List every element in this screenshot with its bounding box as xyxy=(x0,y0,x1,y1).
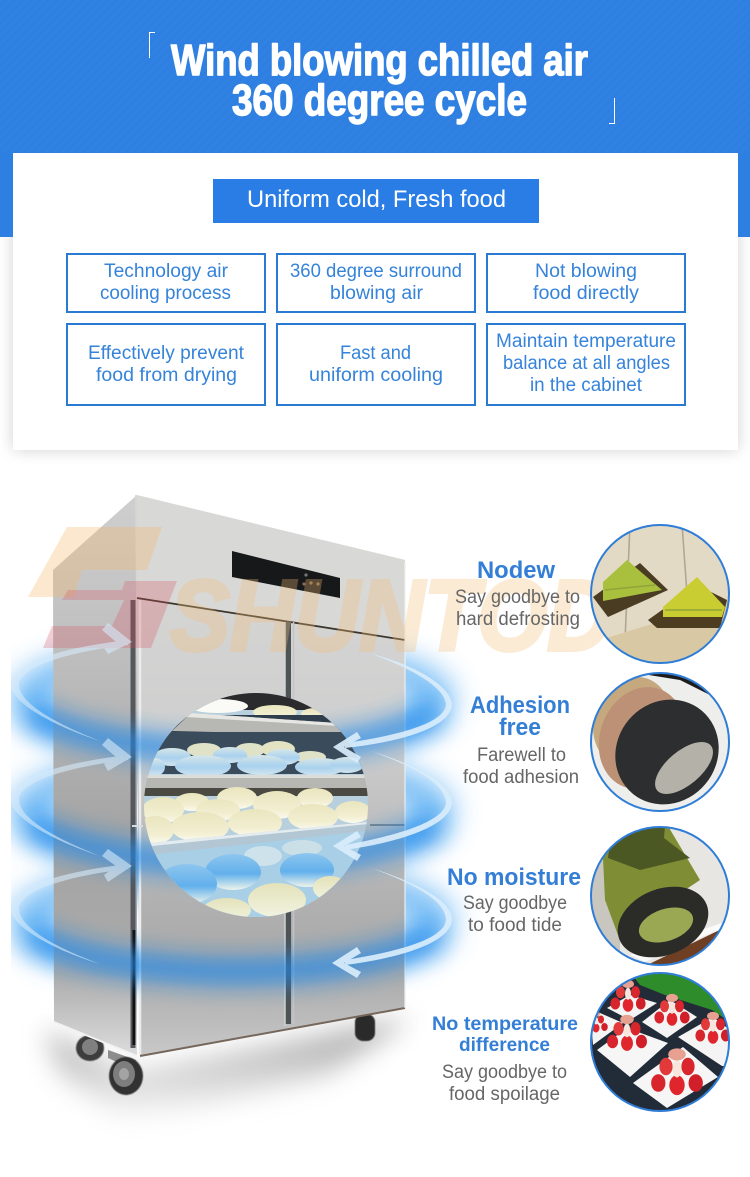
food photo: black sesame roll xyxy=(590,672,730,812)
feature box: prevent drying: Effectively prevent xyxy=(88,343,245,364)
benefit text: no temperature difference: difference xyxy=(459,1035,550,1056)
lower shelf rail xyxy=(151,824,366,859)
subtitle banner: Uniform cold, Fresh food xyxy=(247,186,506,213)
food photo: strawberry desserts xyxy=(584,972,731,1112)
title xyxy=(171,36,588,125)
benefit text: no temperature difference: food spoilage xyxy=(449,1084,560,1105)
benefit text: no temperature difference: No temperature xyxy=(432,1014,578,1035)
benefit text: no moisture xyxy=(447,864,581,936)
feature box: temperature balance: in the cabinet xyxy=(530,375,643,396)
control panel xyxy=(232,551,340,598)
bottom shelf buns xyxy=(156,831,365,917)
benefit text: no temperature difference xyxy=(432,1014,578,1105)
logo watermark xyxy=(28,527,612,672)
casters xyxy=(76,1014,375,1095)
feature box: prevent drying xyxy=(67,324,265,405)
blue air rings behind the fridge xyxy=(26,654,438,968)
benefit text: nodew xyxy=(455,557,580,630)
feature box: technology air cooling: Technology air xyxy=(104,261,229,282)
benefit text: nodew: Nodew xyxy=(477,557,555,584)
benefit text: no moisture: Say goodbye xyxy=(463,893,567,914)
benefit text: adhesion free: Adhesion xyxy=(470,692,570,719)
benefit text: adhesion free: Farewell to xyxy=(477,745,566,766)
floor shadow xyxy=(45,1018,410,1120)
title bracket: top left xyxy=(150,32,155,58)
feature box: technology air cooling xyxy=(67,254,265,312)
logo watermark: SHUNTOD xyxy=(170,560,612,672)
top panel xyxy=(137,495,405,640)
feature box: surround blowing air: blowing air xyxy=(330,283,424,304)
feature box: surround blowing air xyxy=(277,254,475,312)
feature box: prevent drying: food from drying xyxy=(96,365,237,386)
feature box: fast cooling: uniform cooling xyxy=(309,365,443,386)
door seams xyxy=(137,598,405,640)
blue air bands in front of the fridge xyxy=(30,712,438,972)
subtitle banner xyxy=(213,179,539,223)
top shelf with buns xyxy=(164,693,346,740)
feature box: temperature balance xyxy=(487,324,685,405)
benefit text: no moisture: No moisture xyxy=(447,864,581,891)
benefit text: adhesion free: free xyxy=(499,714,541,741)
feature box: not blowing directly: Not blowing xyxy=(535,261,637,282)
fridge xyxy=(45,495,410,1120)
feature box: temperature balance: Maintain temperature xyxy=(496,331,676,352)
benefit text: adhesion free: food adhesion xyxy=(463,767,579,788)
benefit text: no temperature difference: Say goodbye to xyxy=(442,1062,567,1083)
benefit text: adhesion free xyxy=(463,692,579,788)
benefit text: no moisture: to food tide xyxy=(468,915,562,936)
feature box: not blowing directly: food directly xyxy=(533,283,640,304)
cabinet left edge shade xyxy=(52,570,54,1022)
title bracket: bottom right xyxy=(609,98,614,124)
feature box: technology air cooling: cooling process xyxy=(100,283,231,304)
food photo: matcha roll xyxy=(590,826,730,970)
benefit text: nodew: Say goodbye to xyxy=(455,587,580,608)
feature box: fast cooling xyxy=(277,324,475,405)
air ring lines and arrows xyxy=(11,623,452,978)
right arrows xyxy=(332,654,452,978)
feature box: temperature balance: balance at all angles xyxy=(503,353,670,374)
cabinet front xyxy=(135,495,405,1056)
cabinet side xyxy=(53,495,137,1055)
middle shelf with buns xyxy=(148,732,364,775)
left arrows xyxy=(11,623,132,964)
food photo: crepe cakes xyxy=(590,524,730,664)
title: 360 degree cycle xyxy=(232,76,527,125)
benefit text: nodew: hard defrosting xyxy=(456,609,580,630)
middle shelf rail xyxy=(146,778,366,788)
feature box: not blowing directly xyxy=(487,254,685,312)
title: Wind blowing chilled air xyxy=(171,36,588,85)
panel: uniform cold features xyxy=(0,153,750,450)
bread window xyxy=(136,690,375,922)
header background xyxy=(0,0,750,237)
feature box: fast cooling: Fast and xyxy=(340,343,411,364)
feature box: surround blowing air: 360 degree surround xyxy=(290,261,462,282)
lower shelf buns xyxy=(136,787,371,844)
